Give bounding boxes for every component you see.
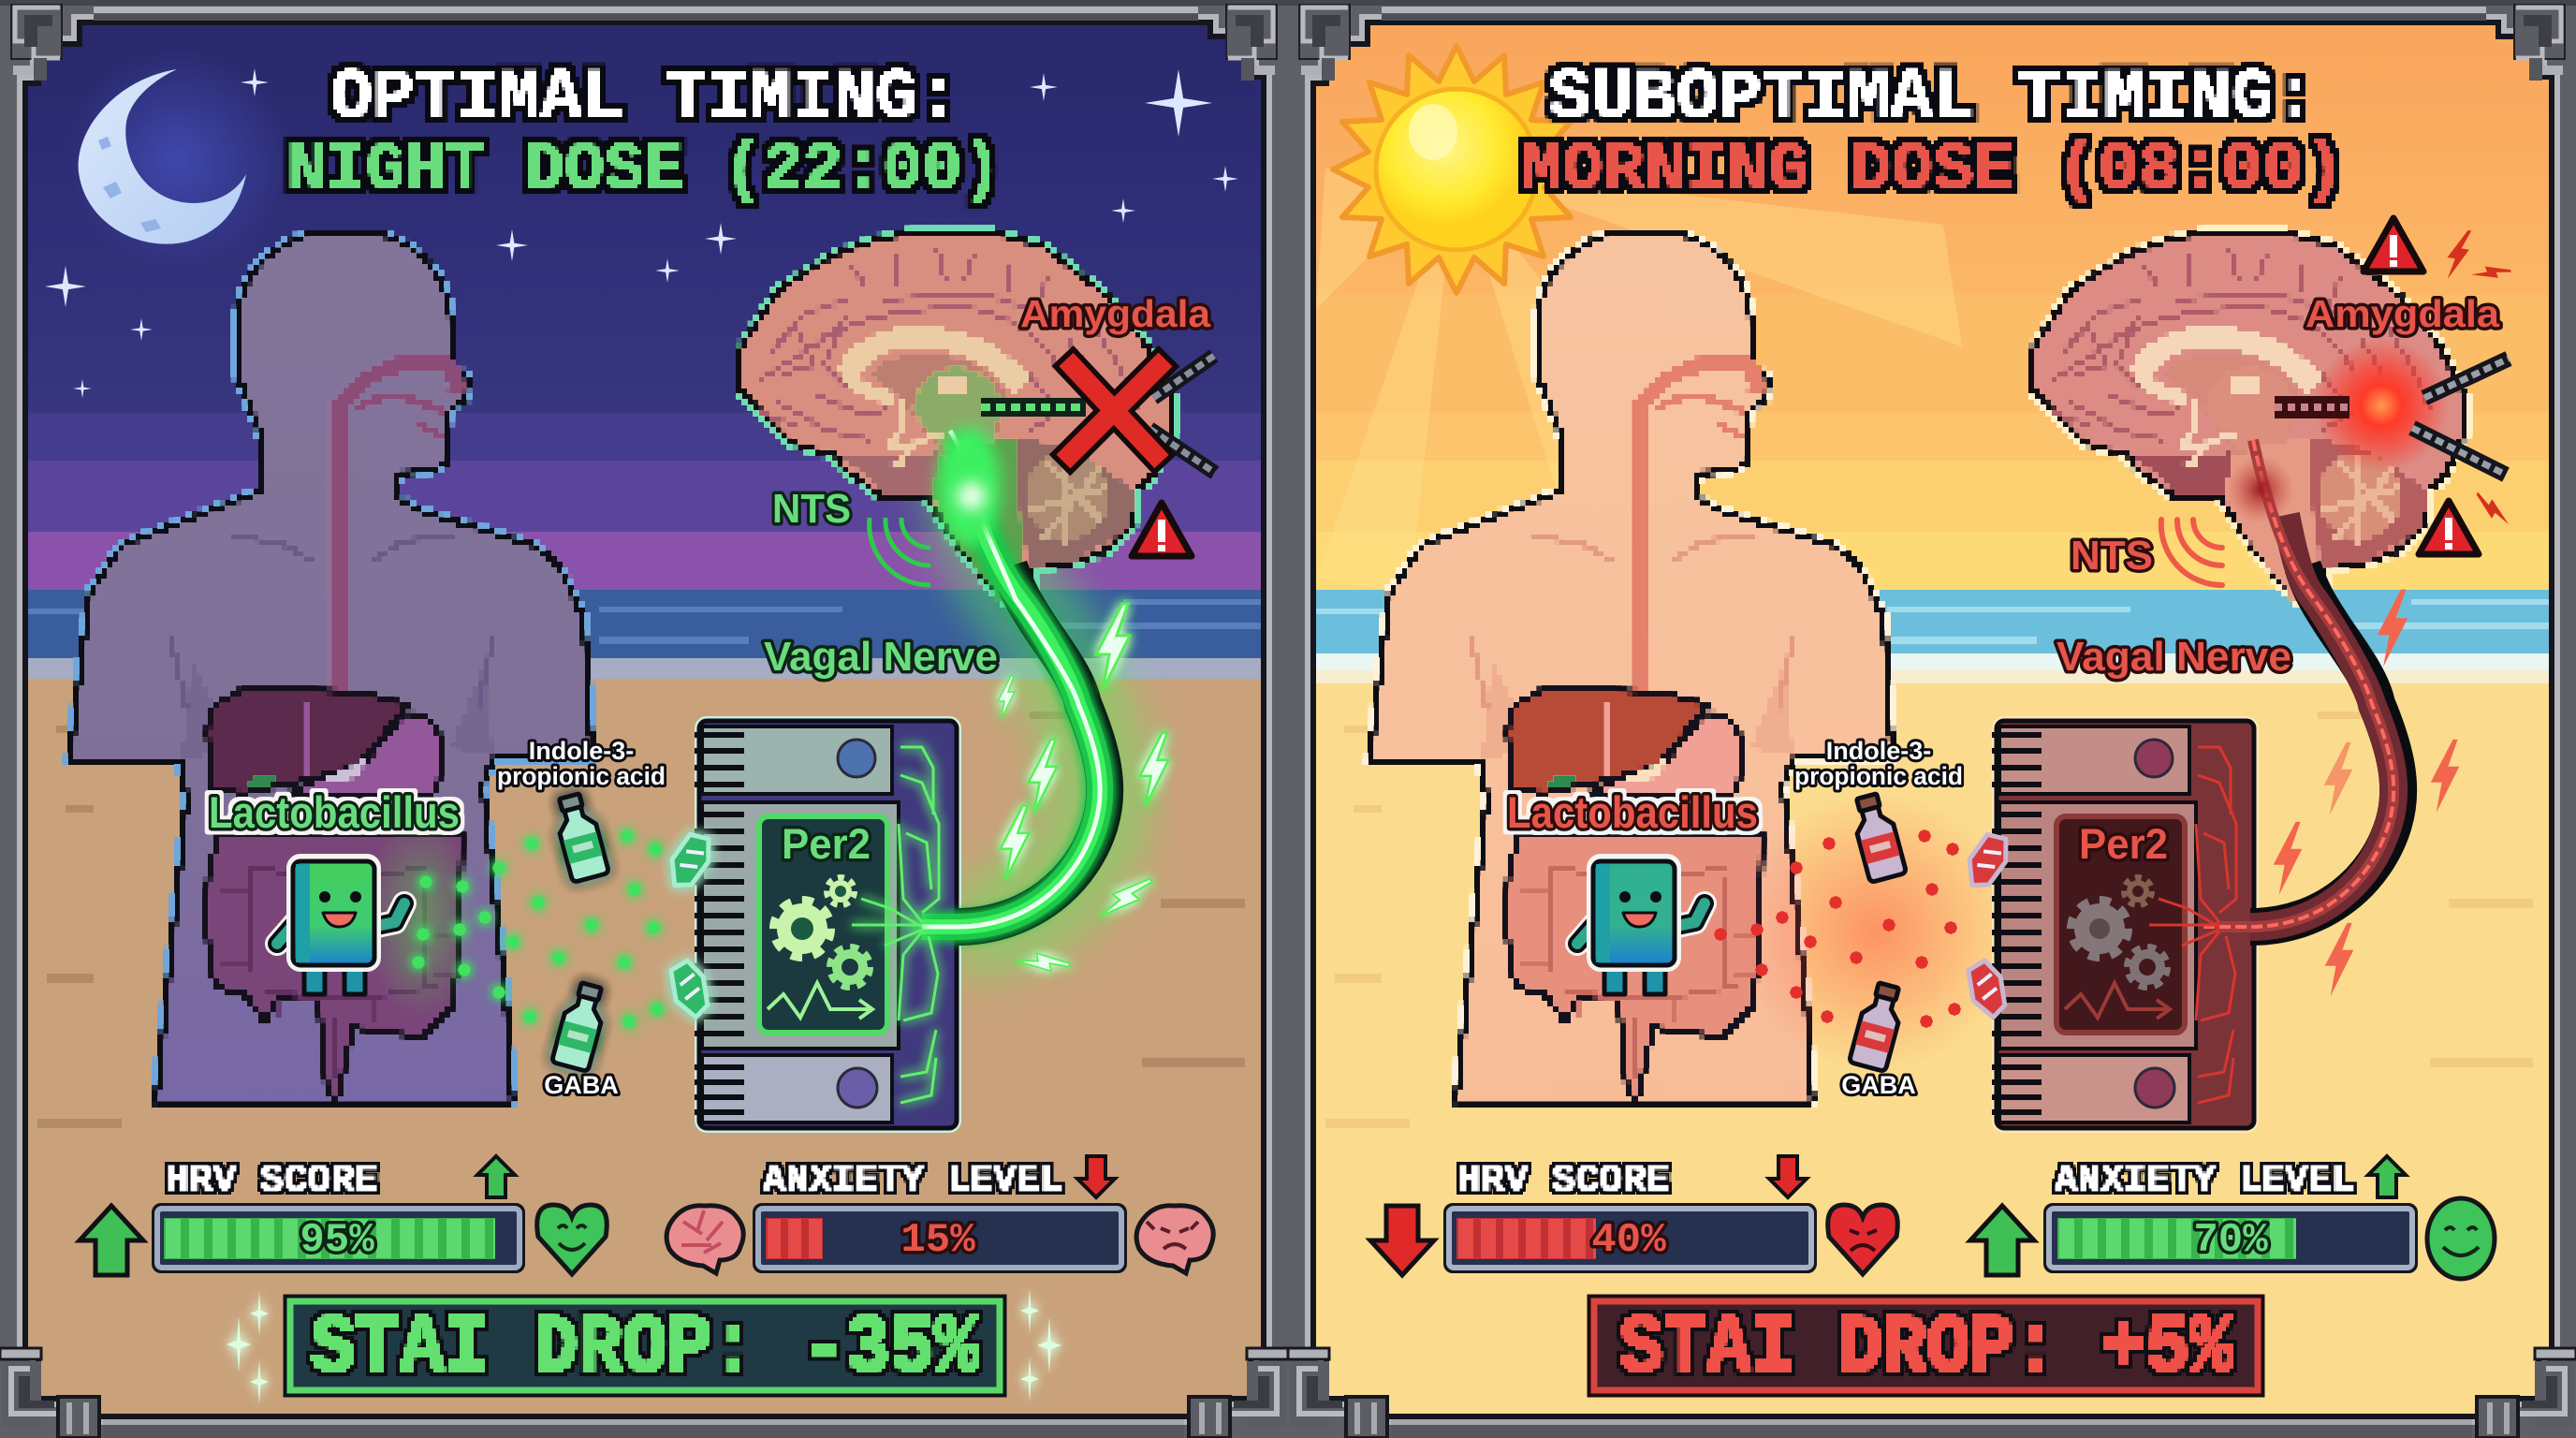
stars xyxy=(45,68,1238,398)
lightning bolts xyxy=(998,604,1168,976)
metric labels: HRV SCORE xyxy=(166,1158,378,1203)
metric: HRV score: 95% xyxy=(300,1217,374,1264)
gut organs xyxy=(206,688,461,1097)
label: NTS: NTS xyxy=(772,486,851,532)
label: GABA: GABA xyxy=(1841,1071,1916,1099)
synapse chains xyxy=(2275,359,2509,475)
result box: STAI drop: STAI DROP: +5% xyxy=(1619,1303,2233,1396)
metric: Anxiety level: 15% xyxy=(900,1217,975,1264)
label: Lactobacillus: Lactobacillus xyxy=(209,787,460,837)
body silhouette xyxy=(1370,234,1892,1102)
amygdala hotspot xyxy=(2314,338,2449,473)
title: NIGHT DOSE (22:00) xyxy=(286,132,1002,209)
night sky and beach background xyxy=(0,0,1288,1428)
synapse chains xyxy=(981,356,1215,473)
lightning bolts xyxy=(2274,590,2459,996)
vesicle: bottom bottle xyxy=(1849,980,1907,1072)
panel: optimal night dose xyxy=(0,0,1288,1438)
metabolite particles xyxy=(412,829,664,1028)
NTS glow xyxy=(937,427,1001,547)
label: Vagal Nerve: Vagal Nerve xyxy=(2056,634,2291,680)
sparkles xyxy=(227,1288,1061,1404)
NTS red spot xyxy=(2227,456,2294,523)
vagal nerve xyxy=(922,431,1105,927)
warning icon: bottom xyxy=(2419,501,2479,554)
chip energy veins xyxy=(852,747,939,1103)
vesicle: top bottle xyxy=(551,791,609,883)
corner ornaments xyxy=(0,5,1288,1438)
title xyxy=(1521,58,2345,209)
label: Indole-3-propionic acid xyxy=(1794,737,1963,790)
mascot: Lactobacillus xyxy=(1577,858,1705,994)
broken vesicles at chip xyxy=(663,829,717,1021)
title xyxy=(286,58,1002,209)
gut metabolite glow xyxy=(365,814,477,1020)
label: GABA: GABA xyxy=(544,1071,619,1099)
metric labels: ANXIETY LEVEL xyxy=(763,1158,1062,1203)
brain xyxy=(2033,232,2465,599)
vesicle: bottom bottle xyxy=(551,980,609,1072)
label: Indole-3-propionic acid: propionic acid xyxy=(497,762,666,790)
metric labels xyxy=(1457,1158,2354,1203)
icon: moon xyxy=(66,47,290,271)
label: Indole-3-propionic acid xyxy=(497,737,666,790)
heartbeat line xyxy=(2065,983,2170,1019)
panel outline xyxy=(28,7,1261,1438)
label: Amygdala: Amygdala xyxy=(2305,292,2500,335)
Per2 chip xyxy=(695,721,957,1128)
result box: STAI drop: STAI DROP: -35% xyxy=(311,1303,979,1396)
label: Lactobacillus: Lactobacillus xyxy=(1507,787,1758,837)
icon: sun xyxy=(1333,46,1580,293)
metric labels xyxy=(166,1158,1062,1203)
warning icon: top xyxy=(2364,218,2423,271)
label: NTS: NTS xyxy=(2071,533,2153,579)
brain xyxy=(740,232,1172,599)
metric labels: ANXIETY LEVEL xyxy=(2055,1158,2354,1203)
Per2 chip xyxy=(1992,721,2254,1128)
label: Vagal Nerve: Vagal Nerve xyxy=(764,634,998,680)
label: Per2: Per2 xyxy=(2079,820,2168,868)
heartbeat line xyxy=(768,983,872,1019)
metric: Anxiety level xyxy=(666,1156,1213,1273)
nerve glow xyxy=(957,440,1100,927)
label: Indole-3-propionic acid: Indole-3- xyxy=(529,737,634,765)
label: Indole-3-propionic acid: propionic acid xyxy=(1794,762,1963,790)
metric: HRV score xyxy=(1370,1156,1897,1275)
label: Amygdala: Amygdala xyxy=(1020,292,1211,335)
metabolite particles xyxy=(1714,829,1961,1028)
metric: Anxiety level xyxy=(1970,1156,2495,1279)
sunrise sky and beach background xyxy=(1288,0,2576,1432)
title: MORNING DOSE (08:00) xyxy=(1521,132,2345,209)
vagal nerve xyxy=(2202,440,2398,927)
red bolts near warnings xyxy=(2444,227,2515,527)
metric: HRV score xyxy=(80,1156,607,1275)
broken vesicles at chip xyxy=(1960,829,2014,1021)
metric: HRV score: 40% xyxy=(1591,1217,1666,1264)
gut organs xyxy=(1506,688,1762,1097)
NTS signal arcs xyxy=(870,518,930,585)
label: Indole-3-propionic acid: Indole-3- xyxy=(1826,737,1931,765)
title: OPTIMAL TIMING: xyxy=(330,58,959,139)
corner ornaments xyxy=(1288,5,2576,1438)
metric: Anxiety level: 70% xyxy=(2193,1217,2268,1264)
metric labels: HRV SCORE xyxy=(1457,1158,1670,1203)
warning icon xyxy=(1132,503,1192,556)
panel: suboptimal morning dose xyxy=(1288,0,2576,1438)
vesicle: top bottle xyxy=(1849,791,1907,883)
mascot: Lactobacillus xyxy=(277,858,404,994)
gears icon xyxy=(774,877,870,987)
label: Per2: Per2 xyxy=(782,820,871,868)
red metabolite haze xyxy=(1735,791,2016,1072)
red X blocked amygdala xyxy=(1060,356,1169,465)
title: SUBOPTIMAL TIMING: xyxy=(1548,58,2317,139)
chip veins xyxy=(2149,747,2236,1103)
gears icon xyxy=(2071,877,2167,987)
body silhouette xyxy=(70,234,592,1102)
panel outline xyxy=(1316,7,2549,1438)
NTS signal arcs xyxy=(2161,520,2222,585)
